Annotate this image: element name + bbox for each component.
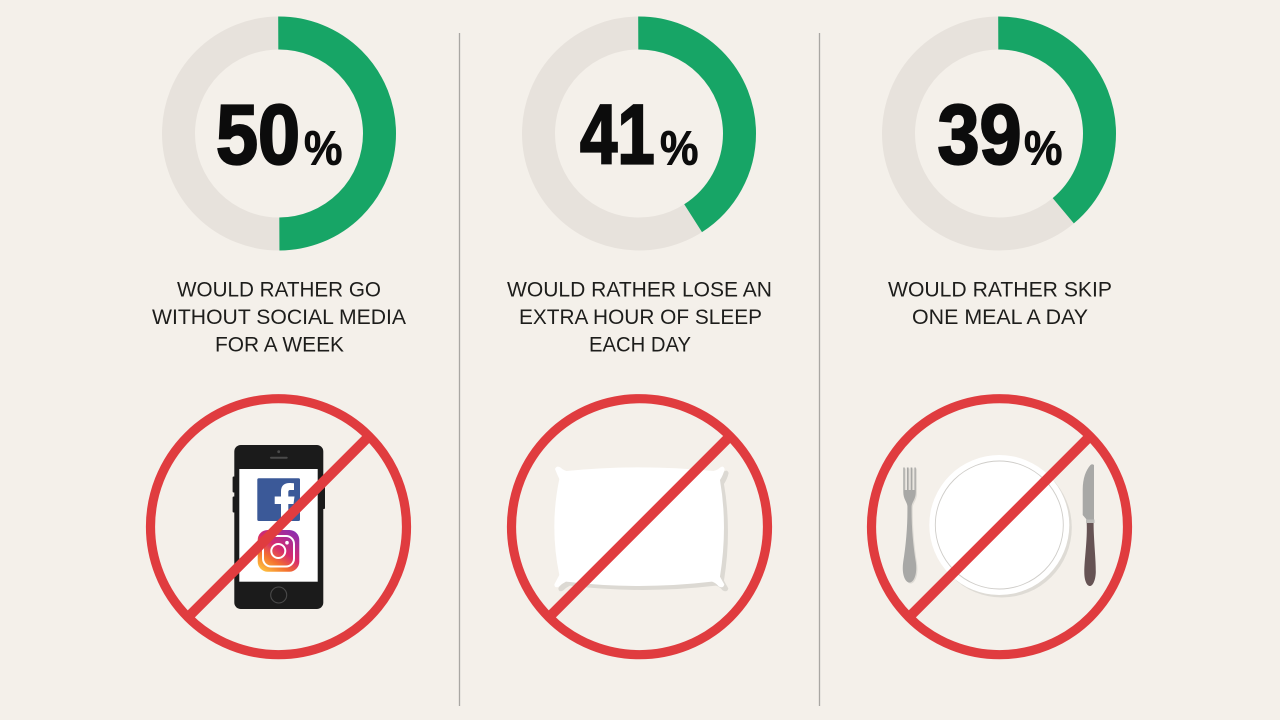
stat: 39%: % (1024, 121, 1062, 175)
icon: prohibition sign (150, 399, 406, 655)
panel: sleep (507, 33, 772, 655)
icon: prohibition sign (512, 399, 768, 655)
stat: 41%: % (660, 121, 698, 175)
stat: 50% (216, 88, 342, 181)
caption: social media: WOULD RATHER GO (177, 278, 381, 302)
panel: social media (150, 33, 407, 655)
stat: 39% (938, 88, 1062, 181)
stat: 41%: 41 (580, 88, 655, 182)
caption: social media (152, 278, 407, 356)
icon: phone (233, 445, 325, 609)
stat: 50%: 50 (216, 88, 300, 181)
caption: meal: WOULD RATHER SKIP (888, 278, 1112, 302)
stat: 50%: % (304, 121, 342, 175)
donut chart: 41% (538, 33, 740, 234)
donut chart: 50% (178, 33, 380, 234)
icon: facebook (257, 478, 300, 521)
icon: fork (903, 468, 917, 584)
icon: pillow crossed out (512, 399, 768, 655)
stat: 39%: 39 (938, 88, 1022, 181)
caption: meal: ONE MEAL A DAY (912, 305, 1088, 329)
icon: pillow (554, 467, 729, 591)
caption: sleep: EACH DAY (589, 332, 691, 356)
caption: sleep: EXTRA HOUR OF SLEEP (519, 305, 762, 329)
caption: meal (888, 278, 1112, 329)
caption: sleep (507, 278, 772, 356)
panel: meal (872, 33, 1128, 655)
icon: instagram (258, 530, 299, 572)
icon: knife (1083, 464, 1096, 586)
caption: sleep: WOULD RATHER LOSE AN (507, 278, 772, 302)
icon: phone with social apps, crossed out (150, 399, 406, 655)
icon: plate (929, 455, 1072, 598)
donut chart: 39% (898, 33, 1100, 234)
caption: social media: WITHOUT SOCIAL MEDIA (152, 305, 407, 329)
stat: 41% (580, 88, 698, 182)
icon: place setting crossed out (872, 399, 1128, 655)
caption: social media: FOR A WEEK (215, 332, 345, 356)
icon: prohibition sign (872, 399, 1128, 655)
